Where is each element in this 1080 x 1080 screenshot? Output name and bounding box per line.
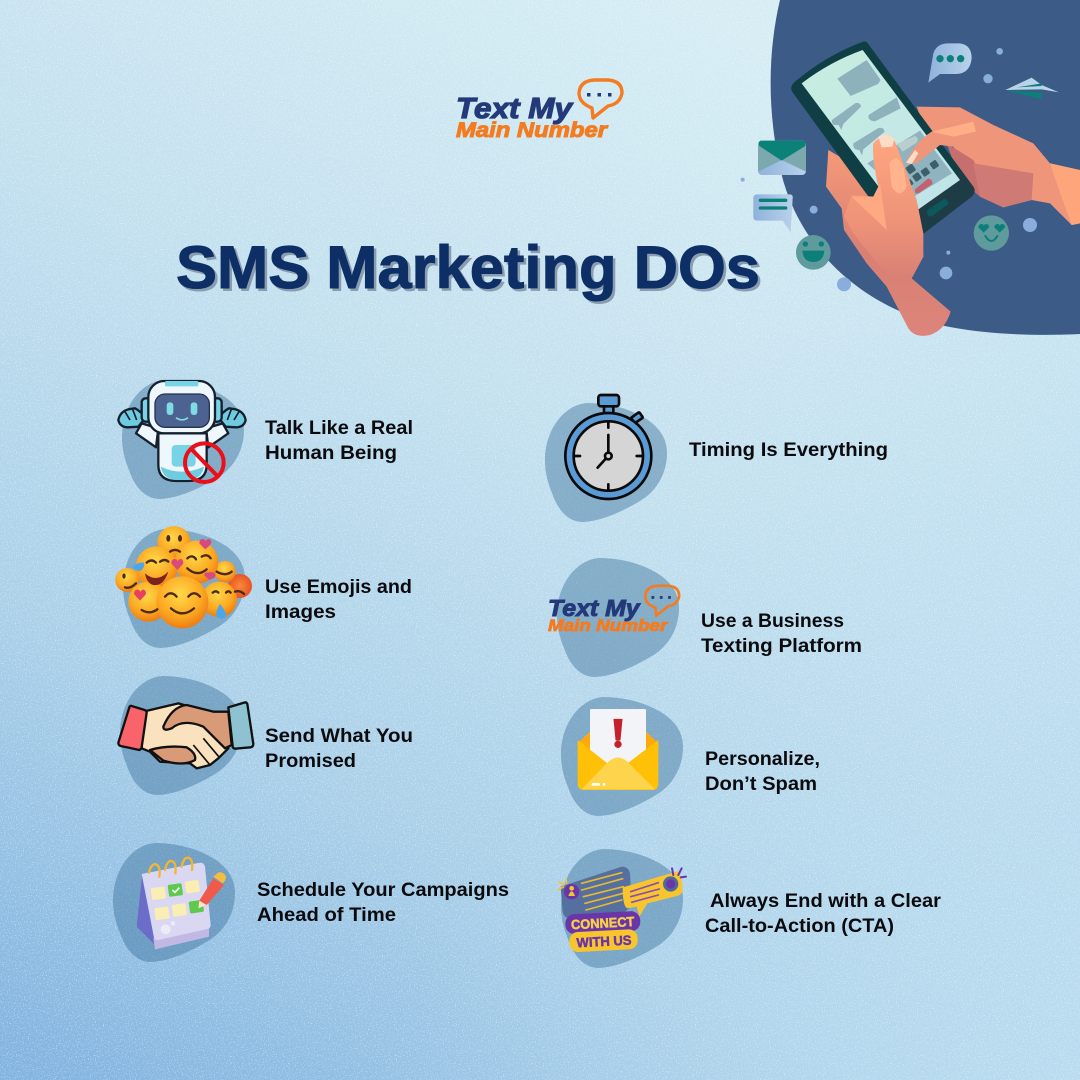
label bbox=[265, 418, 413, 464]
icon: heart-eyes smiley bbox=[974, 215, 1009, 251]
icon: small logo: Main Number bbox=[548, 616, 669, 635]
label: Schedule Your Campaigns bbox=[257, 880, 509, 901]
icon: envelope with alert bbox=[578, 709, 658, 790]
icon: speech bubble dots bbox=[928, 43, 972, 83]
icon blob bbox=[557, 558, 679, 677]
label: Texting Platform bbox=[701, 636, 862, 657]
logo: Main Number bbox=[456, 119, 609, 142]
label: Promised bbox=[265, 751, 356, 772]
dark blue corner shape bbox=[771, 0, 1080, 335]
icon: small logo: Text My bbox=[548, 595, 641, 621]
icon: chat bubble lines bbox=[753, 194, 793, 232]
label: Ahead of Time bbox=[257, 905, 396, 926]
icon blob bbox=[561, 849, 683, 968]
illustration: hands holding phone bbox=[741, 41, 1080, 336]
label bbox=[705, 891, 942, 937]
icon blob bbox=[545, 403, 667, 522]
yellow pill: WITH US bbox=[576, 933, 632, 950]
item: schedule your campaigns bbox=[113, 843, 509, 962]
icon: robot with no sign bbox=[118, 381, 246, 482]
label: Personalize, bbox=[705, 749, 820, 770]
label: Send What You bbox=[265, 726, 413, 747]
label: Images bbox=[265, 602, 336, 623]
icon: smiley bbox=[796, 235, 831, 270]
label: Use a Business bbox=[701, 611, 844, 632]
purple pill: CONNECT bbox=[571, 914, 635, 932]
icon: stopwatch bbox=[565, 395, 651, 499]
icon blob bbox=[561, 697, 683, 816]
title: SMS Marketing DOs bbox=[178, 236, 762, 304]
icon: emoji pile bbox=[115, 526, 252, 628]
label bbox=[701, 611, 862, 657]
icon blob bbox=[122, 380, 244, 499]
icon: paper plane bbox=[1005, 78, 1059, 99]
item: timing is everything bbox=[545, 395, 888, 522]
item: use a business texting platform bbox=[548, 558, 862, 677]
label: Always End with a Clear bbox=[710, 891, 942, 912]
label: Call-to-Action (CTA) bbox=[705, 916, 894, 937]
label: Human Being bbox=[265, 443, 397, 464]
item: always end with a clear cta bbox=[558, 849, 942, 968]
label: Talk Like a Real bbox=[265, 418, 413, 439]
icon blob bbox=[123, 529, 245, 648]
label: Don’t Spam bbox=[705, 774, 817, 795]
label bbox=[705, 749, 820, 795]
icon: envelope bbox=[758, 141, 806, 175]
logo bbox=[456, 80, 622, 142]
item: use emojis and images bbox=[115, 526, 412, 648]
label: Timing Is Everything bbox=[689, 440, 888, 461]
icon blob bbox=[113, 843, 235, 962]
label bbox=[257, 880, 509, 926]
logo text: Text My bbox=[456, 93, 574, 125]
item: talk like a real human being bbox=[118, 380, 413, 499]
label bbox=[265, 726, 413, 772]
label bbox=[265, 577, 412, 623]
title: SMS Marketing DOs bbox=[176, 234, 760, 301]
panel: phone illustration corner bbox=[741, 0, 1080, 336]
label: Use Emojis and bbox=[265, 577, 412, 598]
item: send what you promised bbox=[118, 676, 413, 795]
icon: connect with us bubbles bbox=[558, 867, 686, 952]
item: personalize, don't spam bbox=[561, 697, 820, 816]
icon: calendar with pencil bbox=[137, 858, 226, 949]
logo speech bubble bbox=[579, 80, 622, 118]
icon: small logo bbox=[548, 586, 679, 635]
icon: handshake bbox=[118, 702, 253, 768]
icon blob bbox=[120, 676, 242, 795]
